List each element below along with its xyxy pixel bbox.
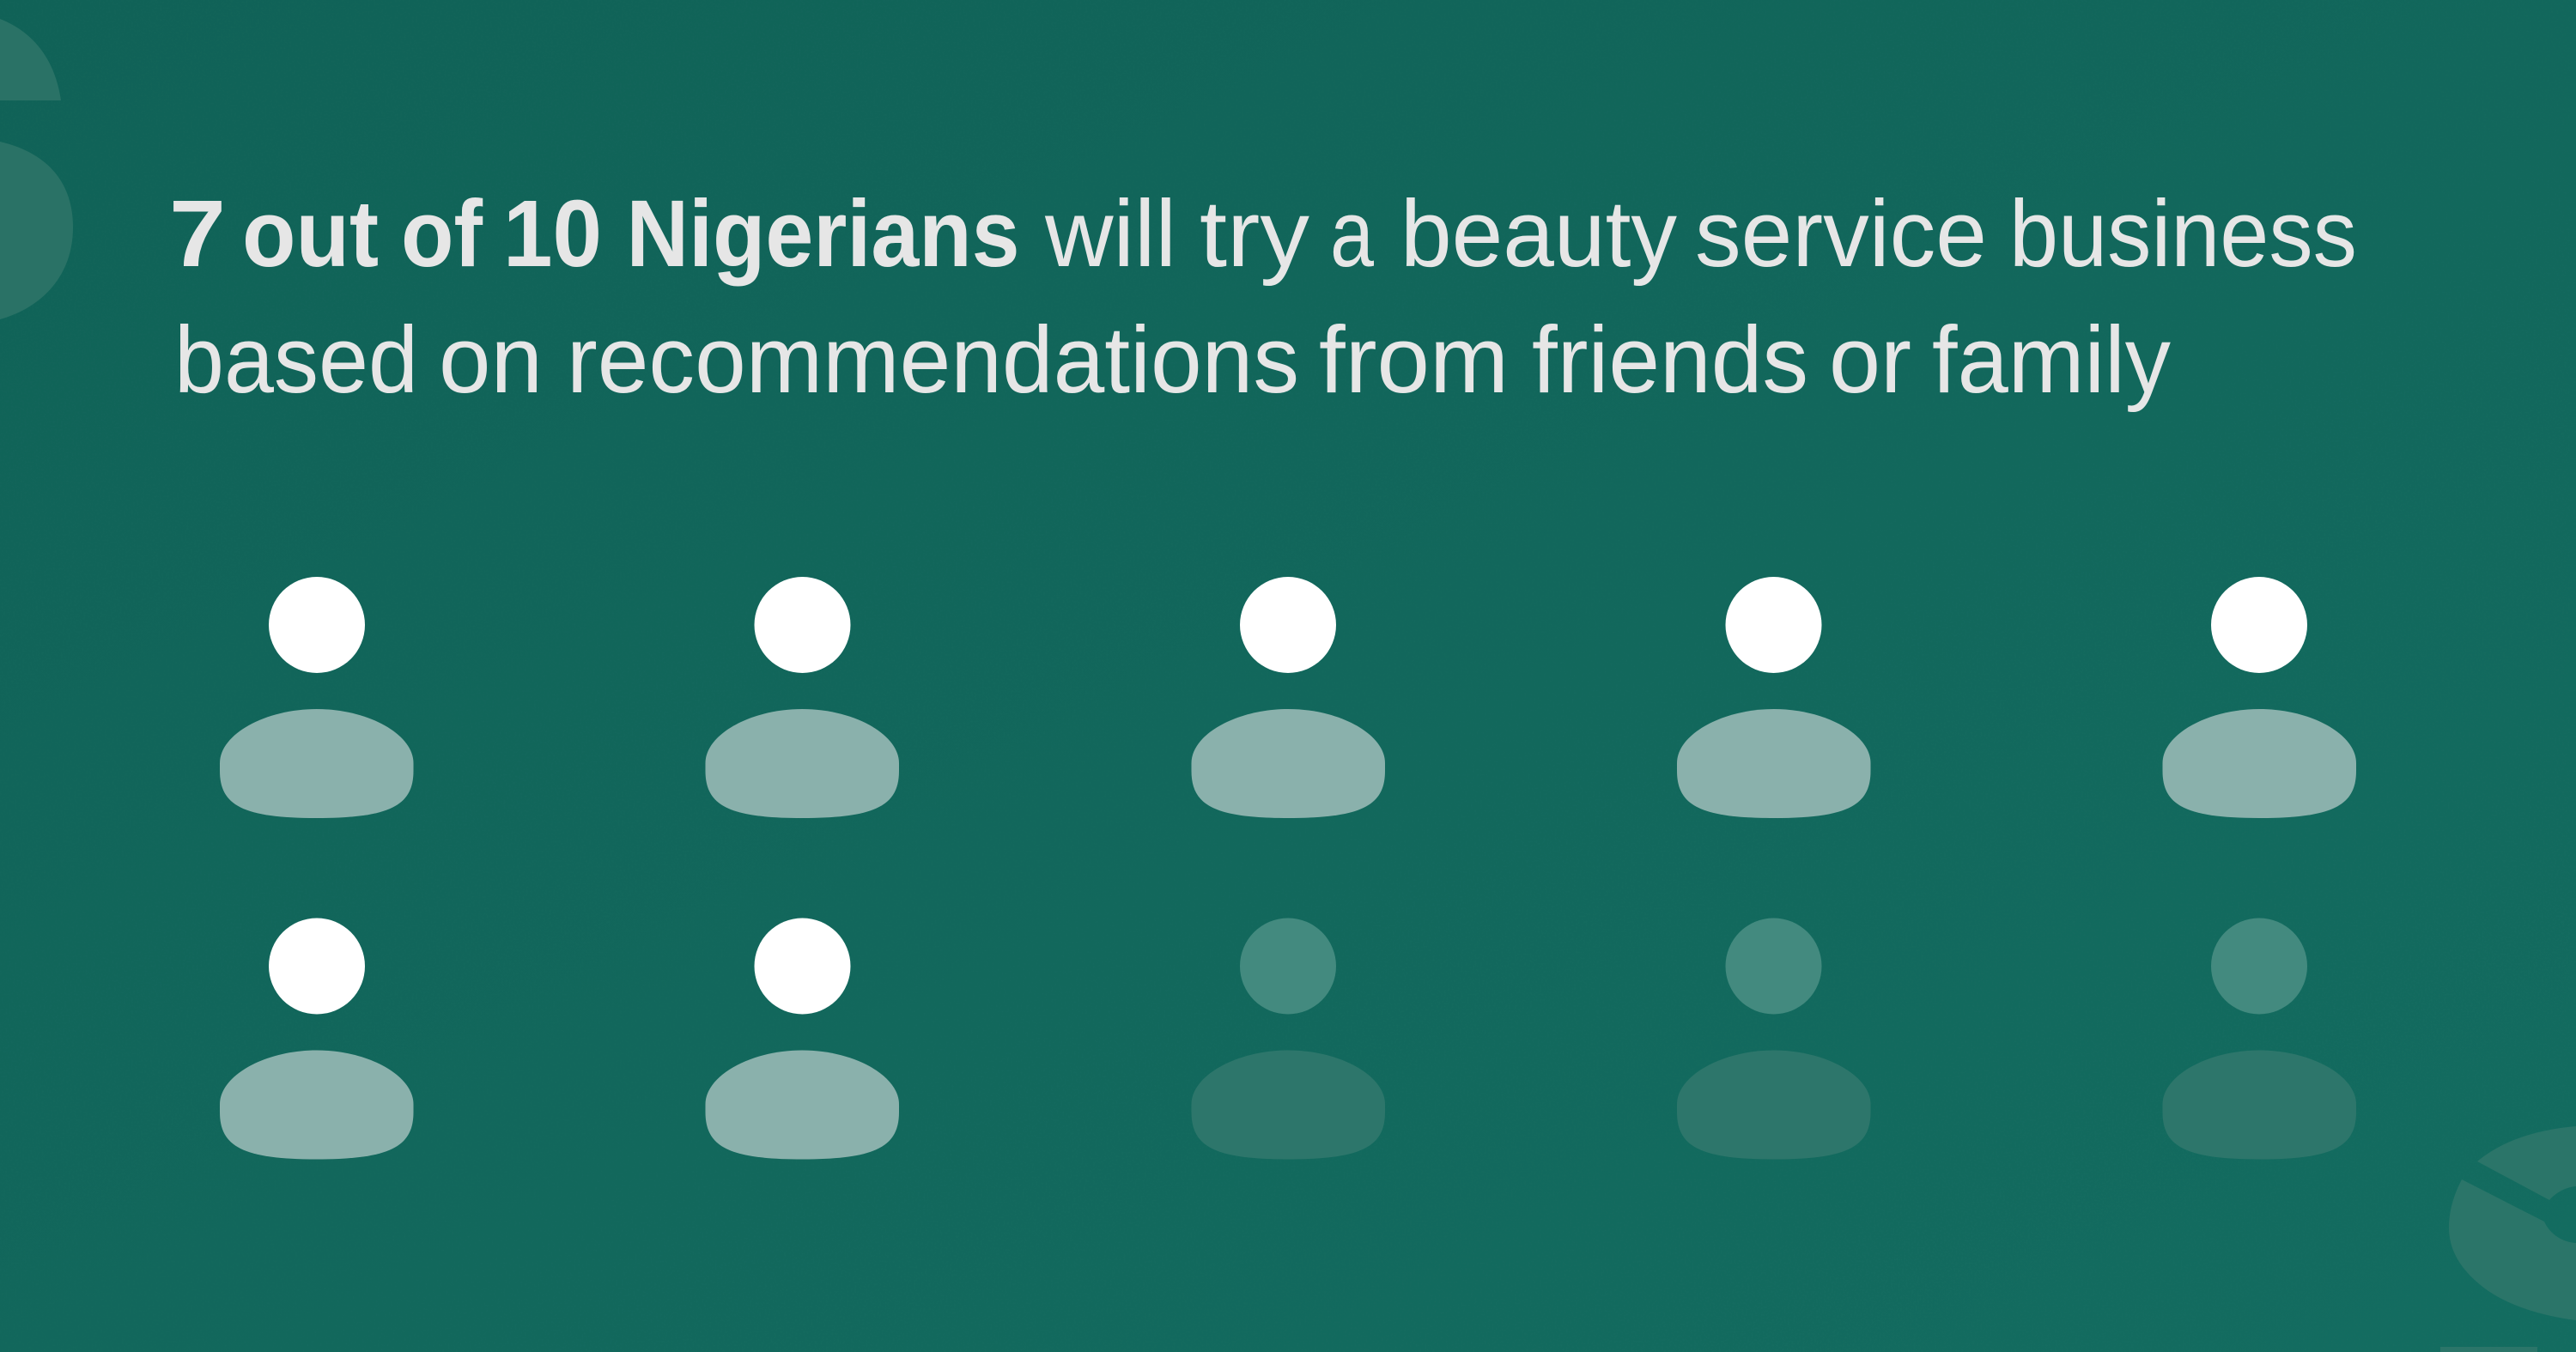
headline: recommendations <box>567 307 1299 413</box>
headline: family <box>1932 307 2171 413</box>
person 4 (highlighted) <box>1677 577 1870 818</box>
headline: beauty <box>1400 181 1677 287</box>
pictogram: 7 of 10 people highlighted <box>220 577 2356 1159</box>
headline: of <box>401 181 483 287</box>
headline: or <box>1829 307 1911 413</box>
person 1 (highlighted) <box>220 577 414 818</box>
decorative logo fragment: top left <box>0 19 73 319</box>
headline: service <box>1695 181 1987 287</box>
headline: out <box>242 181 379 287</box>
headline: 7 <box>169 181 226 287</box>
headline: try <box>1200 181 1309 287</box>
person 8 (dimmed) <box>1192 919 1385 1159</box>
person 3 (highlighted) <box>1192 577 1385 818</box>
person 2 (highlighted) <box>706 577 899 818</box>
headline: on <box>439 307 543 413</box>
person 6 (highlighted) <box>220 919 414 1159</box>
headline: friends <box>1532 307 1808 413</box>
person 5 (highlighted) <box>2162 577 2356 818</box>
person 9 (dimmed) <box>1677 919 1870 1159</box>
headline: a <box>1330 181 1375 287</box>
headline <box>169 181 2357 413</box>
headline: based <box>174 307 418 413</box>
headline: business <box>2009 181 2357 287</box>
headline: will <box>1044 181 1176 287</box>
headline: 10 <box>503 181 602 287</box>
person 7 (highlighted) <box>706 919 899 1159</box>
headline: Nigerians <box>627 181 1020 287</box>
decorative logo fragment: bottom right <box>2440 1126 2576 1352</box>
person 10 (dimmed) <box>2162 919 2356 1159</box>
headline: from <box>1319 307 1509 413</box>
